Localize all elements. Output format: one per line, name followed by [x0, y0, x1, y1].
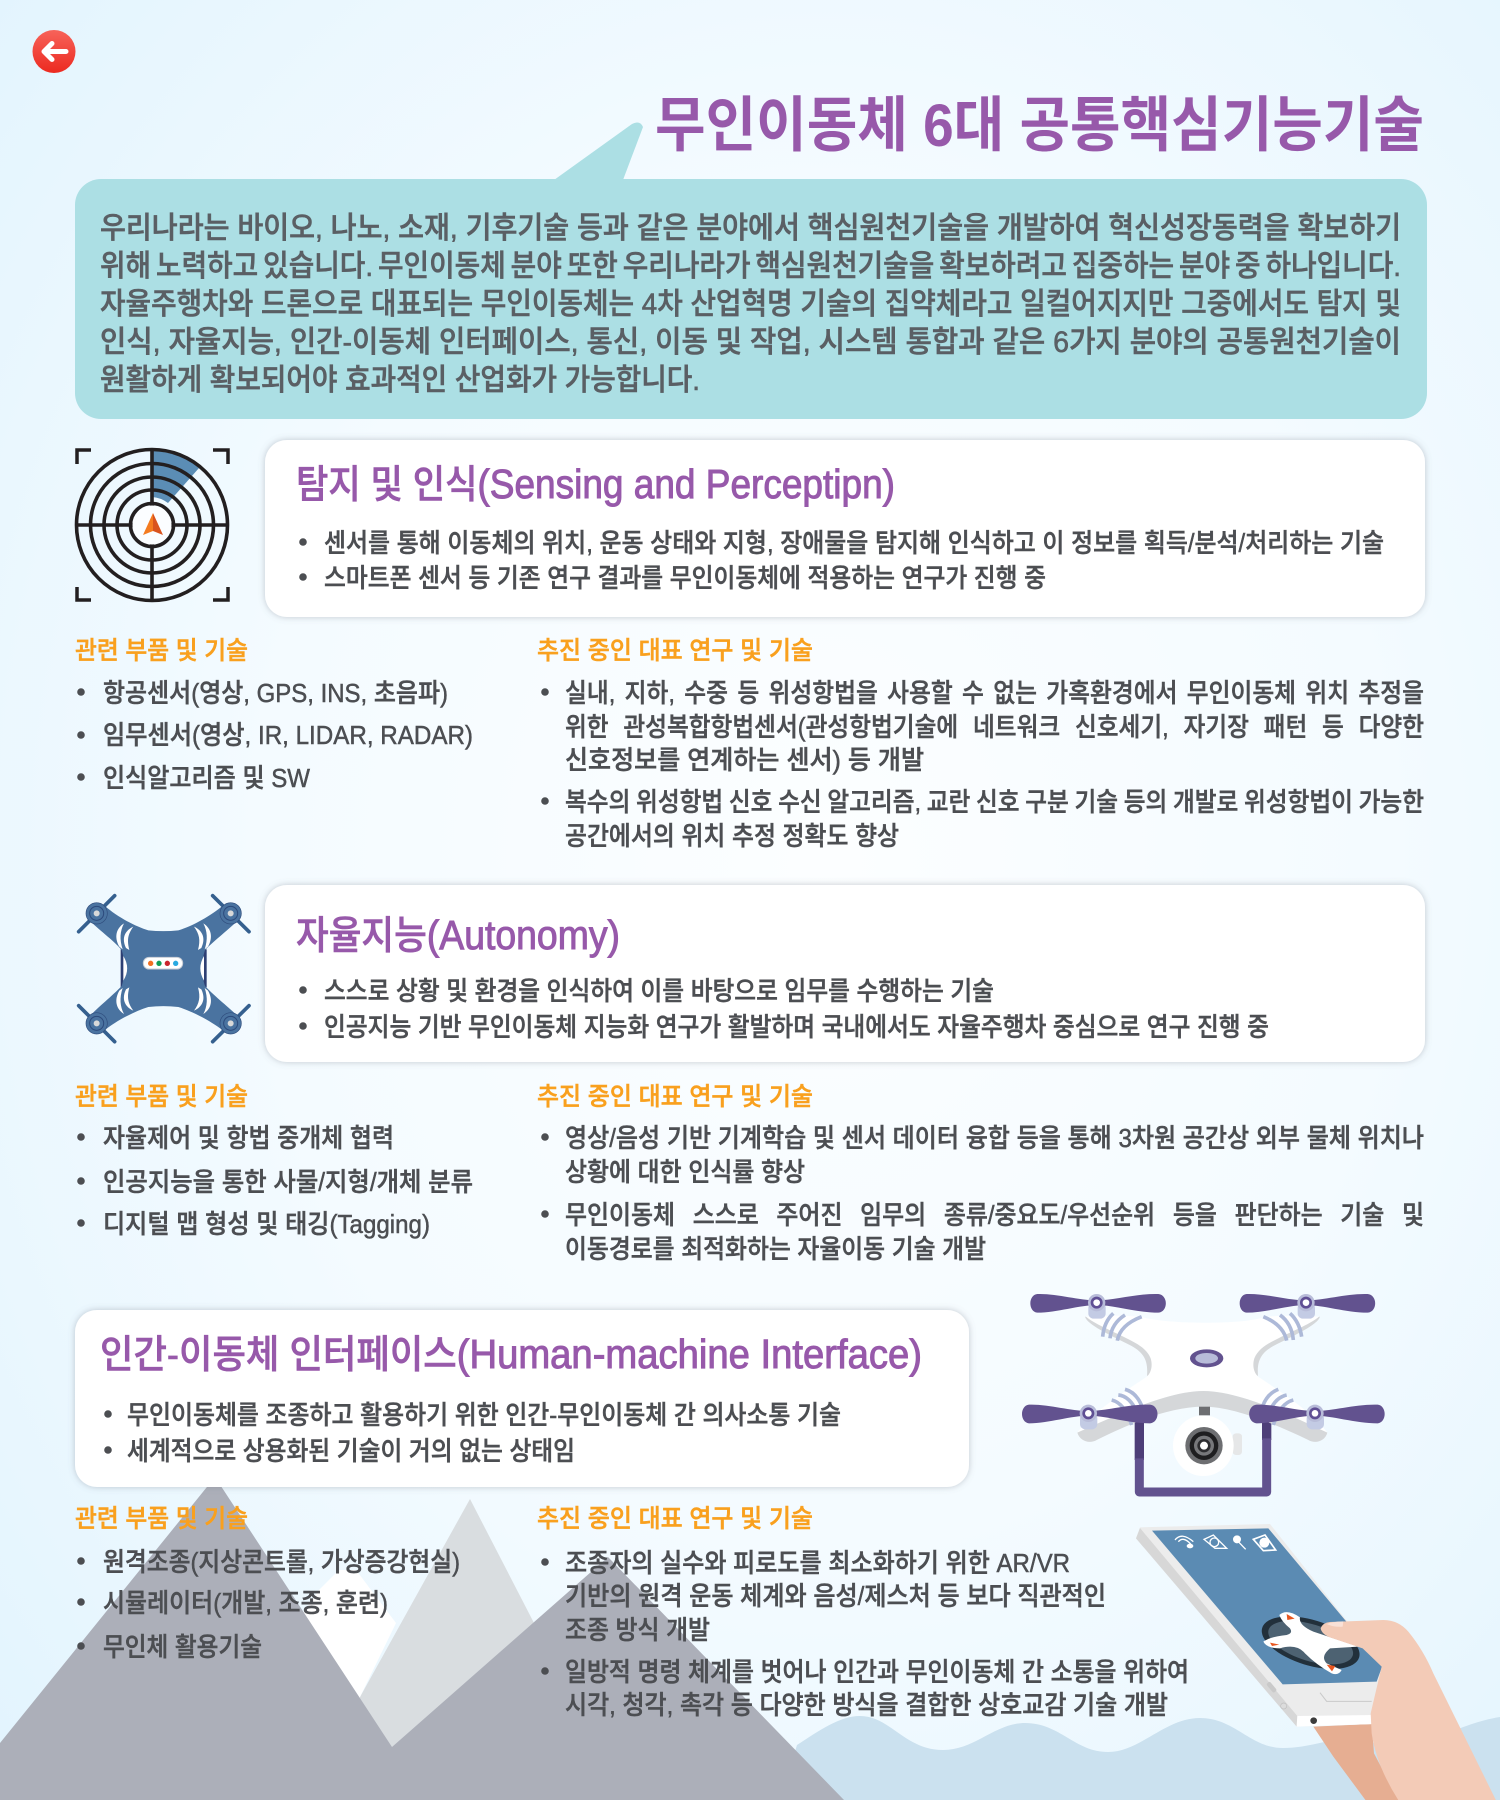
intro speech bubble — [75, 123, 1427, 419]
interface related parts list: 시뮬레이터(개발, 조종, 훈련) — [103, 1588, 388, 1618]
interface research list: 일방적 명령 체계를 벗어나 인간과 무인이동체 간 소통을 위하여 — [565, 1657, 1189, 1687]
panel: autonomy card — [265, 885, 1425, 1062]
sensing research list — [537, 637, 1424, 851]
panel: human-machine interface card — [75, 1310, 969, 1487]
bullets: interface: 세계적으로 상용화된 기술이 거의 없는 상태임 — [127, 1436, 575, 1466]
intro text: 인식, 자율지능, 인간-이동체 인터페이스, 통신, 이동 및 작업, 시스템 통합과 같은 6가지 분야의 공통원천기술이 — [100, 326, 1401, 359]
background waves — [780, 1716, 1500, 1800]
heading: autonomy: 자율지능(Autonomy) — [296, 912, 620, 958]
back button icon — [32, 30, 76, 73]
bullets: sensing: 스마트폰 센서 등 기존 연구 결과를 무인이동체에 적용하는 연구가 진행 중 — [324, 563, 1046, 593]
sensing related parts list: 관련 부품 및 기술 — [75, 637, 248, 665]
interface related parts list: 원격조종(지상콘트롤, 가상증강현실) — [103, 1547, 460, 1577]
icon: camera drone — [1022, 1294, 1385, 1492]
autonomy research list: 상황에 대한 인식률 향상 — [565, 1157, 805, 1187]
bullets: interface: 무인이동체를 조종하고 활용하기 위한 인간-무인이동체 간 의사소통 기술 — [127, 1400, 841, 1430]
sensing related parts list: 임무센서(영상, IR, LIDAR, RADAR) — [103, 720, 473, 750]
heading: interface: 인간-이동체 인터페이스(Human-machine Interface) — [100, 1331, 922, 1377]
icon: hand holding phone — [1136, 1524, 1497, 1800]
sensing research list: 위한 관성복합항법센서(관성항법기술에 네트워크 신호세기, 자기장 패턴 등 다양한 — [565, 712, 1424, 742]
panel: sensing and perception card — [265, 440, 1425, 617]
autonomy research list: 무인이동체 스스로 주어진 임무의 종류/중요도/우선순위 등을 판단하는 기술 및 — [565, 1200, 1424, 1230]
autonomy research list: 추진 중인 대표 연구 및 기술 — [537, 1083, 813, 1111]
intro text: 원활하게 확보되어야 효과적인 산업화가 가능합니다. — [100, 364, 700, 397]
intro text: 우리나라는 바이오, 나노, 소재, 기후기술 등과 같은 분야에서 핵심원천기술을 개발하여 혁신성장동력을 확보하기 — [100, 212, 1401, 245]
sensing research list: 공간에서의 위치 추정 정확도 향상 — [565, 821, 899, 851]
bullets: sensing — [299, 528, 1384, 593]
interface research list: 추진 중인 대표 연구 및 기술 — [537, 1505, 813, 1533]
bullets: autonomy: 인공지능 기반 무인이동체 지능화 연구가 활발하며 국내에서도 자율주행차 중심으로 연구 진행 중 — [324, 1012, 1269, 1042]
autonomy related parts list: 인공지능을 통한 사물/지형/개체 분류 — [103, 1167, 473, 1197]
autonomy related parts list — [75, 1083, 473, 1239]
autonomy related parts list: 자율제어 및 항법 중개체 협력 — [103, 1123, 394, 1153]
autonomy research list: 영상/음성 기반 기계학습 및 센서 데이터 융합 등을 통해 3차원 공간상 외부 물체 위치나 — [565, 1123, 1424, 1153]
icon: radar target — [76, 449, 228, 601]
bullets: autonomy: 스스로 상황 및 환경을 인식하여 이를 바탕으로 임무를 수행하는 기술 — [324, 976, 994, 1006]
sensing research list: 신호정보를 연계하는 센서) 등 개발 — [565, 745, 924, 775]
sensing research list: 복수의 위성항법 신호 수신 알고리즘, 교란 신호 구분 기술 등의 개발로 위성항법이 가능한 — [565, 787, 1424, 817]
interface related parts list — [75, 1505, 460, 1662]
sensing related parts list: 항공센서(영상, GPS, INS, 초음파) — [103, 678, 448, 708]
title: 무인이동체 6대 공통핵심기능기술 — [655, 92, 1424, 159]
autonomy research list: 이동경로를 최적화하는 자율이동 기술 개발 — [565, 1234, 986, 1264]
bullets: autonomy — [299, 976, 1269, 1042]
intro text — [100, 212, 1401, 397]
sensing related parts list — [75, 637, 473, 793]
sensing research list: 실내, 지하, 수중 등 위성항법을 사용할 수 없는 가혹환경에서 무인이동체 위치 추정을 — [565, 678, 1424, 708]
interface research list: 기반의 원격 운동 체계와 음성/제스처 등 보다 직관적인 — [565, 1581, 1106, 1611]
icon: top-view drone — [79, 896, 249, 1042]
autonomy research list — [537, 1083, 1424, 1264]
bullets: sensing: 센서를 통해 이동체의 위치, 운동 상태와 지형, 장애물을 탐지해 인식하고 이 정보를 획득/분석/처리하는 기술 — [324, 528, 1384, 558]
intro text: 위해 노력하고 있습니다. 무인이동체 분야 또한 우리나라가 핵심원천기술을 확보하려고 집중하는 분야 중 하나입니다. — [100, 250, 1401, 283]
interface research list: 조종 방식 개발 — [565, 1615, 710, 1645]
interface research list: 조종자의 실수와 피로도를 최소화하기 위한 AR/VR — [565, 1548, 1070, 1578]
sensing research list: 추진 중인 대표 연구 및 기술 — [537, 637, 813, 665]
interface related parts list: 무인체 활용기술 — [103, 1632, 262, 1662]
interface related parts list: 관련 부품 및 기술 — [75, 1505, 248, 1533]
interface research list: 시각, 청각, 촉각 등 다양한 방식을 결합한 상호교감 기술 개발 — [565, 1690, 1168, 1720]
intro text: 자율주행차와 드론으로 대표되는 무인이동체는 4차 산업혁명 기술의 집약체라고 일컬어지지만 그중에서도 탐지 및 — [100, 288, 1401, 321]
autonomy related parts list: 관련 부품 및 기술 — [75, 1083, 248, 1111]
bullets: interface — [104, 1400, 841, 1466]
heading: sensing: 탐지 및 인식(Sensing and Perceptipn) — [296, 461, 895, 507]
sensing related parts list: 인식알고리즘 및 SW — [103, 763, 310, 793]
background mountains — [0, 1477, 844, 1800]
interface research list — [537, 1505, 1189, 1720]
autonomy related parts list: 디지털 맵 형성 및 태깅(Tagging) — [103, 1209, 430, 1239]
